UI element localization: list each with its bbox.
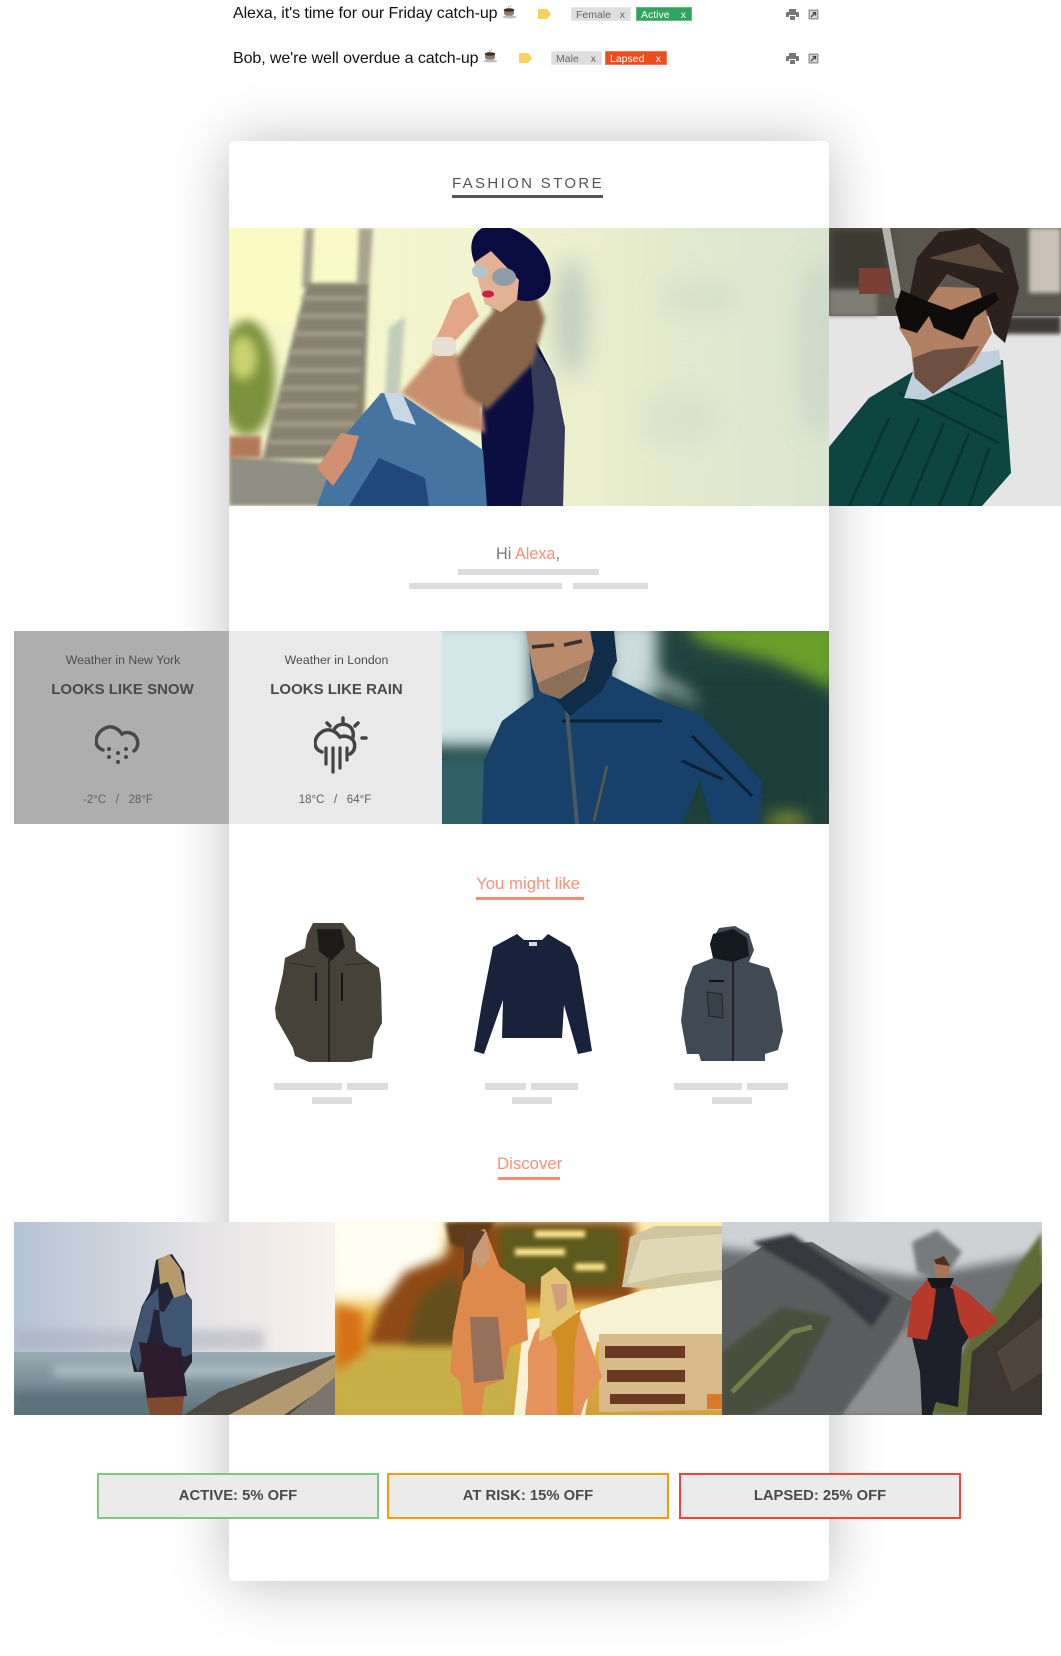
greeting placeholder lines (409, 569, 648, 589)
chip: Female (571, 7, 631, 21)
jacket (482, 631, 762, 824)
product: navy sweater (474, 934, 592, 1054)
sunglasses (895, 290, 999, 340)
green sweater (829, 360, 1011, 506)
torso and forearm skin (401, 353, 485, 433)
chip: Lapsed: x (656, 53, 661, 65)
button: active offer (97, 1473, 379, 1519)
icon: coffee cup (484, 49, 498, 62)
icon: open external (808, 54, 818, 64)
chip: Active: x (681, 9, 686, 21)
heading text: Discover (497, 1154, 562, 1173)
pavement (229, 456, 399, 506)
grass (335, 1347, 515, 1415)
title text: FASHION STORE (452, 175, 604, 192)
product: grey hooded jacket (681, 926, 783, 1061)
weather panel: New York (14, 631, 229, 824)
subject row: Bob (233, 49, 818, 67)
heading text: You might like (476, 874, 580, 893)
button: at risk offer (387, 1473, 669, 1519)
icon: yellow label (519, 53, 532, 63)
chip: Active (636, 7, 692, 21)
face (899, 286, 992, 393)
button: lapsed offer: LAPSED: 25% OFF (754, 1488, 886, 1504)
temperature: -2°C / 28°F (83, 794, 153, 806)
right woman (525, 1307, 602, 1415)
truck (622, 1226, 722, 1292)
stairs (263, 283, 369, 459)
hand (435, 292, 479, 342)
chip: Active: Active (641, 9, 670, 21)
product: olive jacket (275, 923, 382, 1062)
icon: print (786, 9, 799, 20)
icon: open external (808, 10, 818, 20)
chip: Lapsed (605, 51, 667, 65)
chip: Female: x (620, 9, 625, 21)
subject text: Alexa, it's time for our Friday catch-up (233, 5, 497, 22)
heading: LOOKS LIKE SNOW (51, 681, 194, 698)
jeans (317, 393, 487, 506)
man (912, 1280, 972, 1415)
icon: print (786, 53, 799, 64)
hero photo: woman against wall (229, 228, 829, 506)
icon: sun behind rain cloud (314, 716, 368, 774)
location: Weather in New York (66, 653, 180, 667)
temperature: 18°C / 64°F (299, 794, 371, 806)
cliff (927, 1232, 1042, 1415)
heading: You might like (476, 874, 584, 900)
heading: Discover (497, 1154, 562, 1180)
greeting text: Hi Alexa, (496, 545, 560, 563)
title: Fashion Store (452, 175, 604, 198)
photo: two women by a vintage truck (335, 1222, 722, 1415)
hair (909, 228, 1019, 343)
bush (219, 320, 275, 436)
heading underline (476, 897, 584, 900)
location: Weather in London (285, 653, 388, 667)
hand on knee (317, 433, 359, 486)
left woman (450, 1229, 528, 1415)
trees (365, 1222, 635, 1347)
chip: Male (551, 51, 602, 65)
icon: snow cloud (95, 725, 140, 764)
icon: yellow label (538, 9, 551, 19)
hair (457, 278, 545, 410)
title underline (452, 195, 603, 198)
face (526, 631, 594, 699)
weather panel: London (229, 631, 442, 824)
photo: woman on the seafront (14, 1222, 335, 1415)
button: at risk offer: AT RISK: 15% OFF (463, 1488, 593, 1504)
subject text: Bob, we're well overdue a catch-up (233, 50, 478, 67)
chip: Lapsed: Lapsed (610, 53, 644, 65)
heading: LOOKS LIKE RAIN (270, 681, 403, 698)
subject row: Alexa (233, 5, 818, 22)
watch (432, 337, 456, 356)
chip: Male: Male (556, 53, 579, 65)
chip: Male: x (591, 53, 596, 65)
jacket (481, 328, 564, 506)
woman (130, 1254, 192, 1415)
photo: man in rain jacket by waterfall (442, 631, 829, 824)
email card with shadow (229, 141, 829, 1581)
rocks and sea wall (184, 1355, 335, 1415)
button: active offer: ACTIVE: 5% OFF (179, 1488, 297, 1504)
face (475, 251, 519, 312)
sky and stair railing (229, 228, 303, 323)
hood (542, 631, 617, 716)
photo: man hiking in mountains (722, 1222, 1042, 1415)
grey wall shadow (381, 316, 405, 456)
hat (457, 210, 565, 316)
icon: coffee cup (502, 5, 516, 18)
product placeholder lines (274, 1083, 788, 1104)
side photo: man in sunglasses (829, 228, 1061, 506)
heading underline (498, 1177, 560, 1180)
chip: Female: Female (576, 9, 611, 21)
button: lapsed offer (679, 1473, 961, 1519)
